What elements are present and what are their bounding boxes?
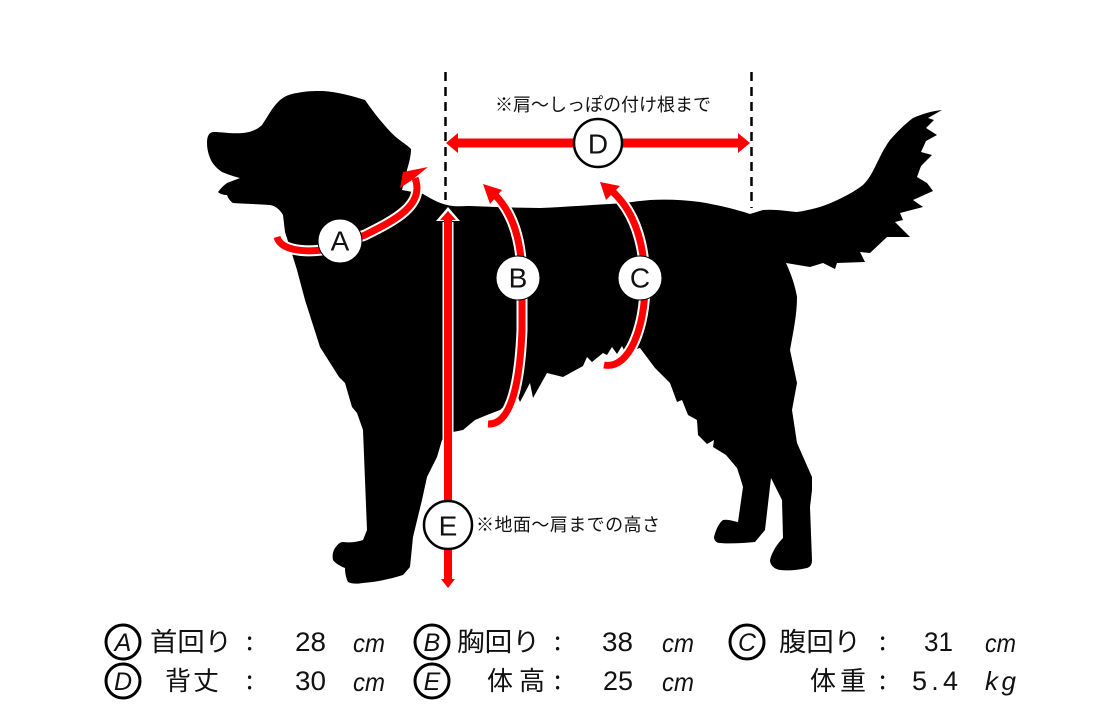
value: neck: 28 [295,627,326,657]
arrow D: back length [446,119,750,167]
label: back length: 背丈 [165,661,219,698]
value: back: 30 [295,666,326,696]
label: chest girth: 胸回り [457,622,540,659]
badge D [106,664,140,698]
note: height: ※地面～肩までの高さ [476,515,660,535]
arrow A: neck girth [277,167,428,263]
arrow B: chest girth: B [509,262,527,294]
unit: cm [353,667,385,697]
value: belly: 31 [924,627,953,657]
separator: : [554,660,561,697]
unit: cm [353,628,385,658]
arrow D: back length: D [588,128,608,160]
badge D: D [114,668,132,696]
unit: cm [662,628,694,658]
separator: : [879,621,886,658]
unit: kg [985,666,1017,696]
measurement row 2 [106,660,1017,698]
badge A: A [113,629,131,657]
dashed guide: tail base [750,72,753,208]
separator: : [246,621,253,658]
badge C: C [738,629,757,657]
separator: : [879,660,886,697]
badge B: B [424,629,440,657]
dog silhouette [207,91,942,584]
badge E: E [424,668,441,696]
value: chest: 38 [602,627,633,657]
label: weight: 体重 [810,661,866,698]
arrow C: belly girth: C [630,262,650,294]
note: back length: ※肩～しっぽの付け根まで [495,95,711,115]
measurement row 1 [106,621,1016,659]
arrow C: belly girth [600,182,662,365]
separator: : [246,660,253,697]
label: height: 体高 [487,661,545,698]
dashed guide: shoulder [444,72,447,200]
badge B [415,625,449,659]
separator: : [554,621,561,658]
unit: cm [985,628,1016,658]
arrow E: height: E [439,510,457,542]
arrow A: neck girth: A [331,226,350,256]
badge A [106,625,140,659]
label: belly girth: 腹回り [779,622,861,659]
arrow E: height [424,207,472,588]
badge E [415,664,449,698]
label: neck girth: 首回り [150,622,232,659]
arrow B: chest girth [483,184,540,424]
unit: cm [662,667,694,697]
value: weight: 5.4 [912,666,958,696]
badge C [730,625,764,659]
value: height: 25 [603,666,633,696]
